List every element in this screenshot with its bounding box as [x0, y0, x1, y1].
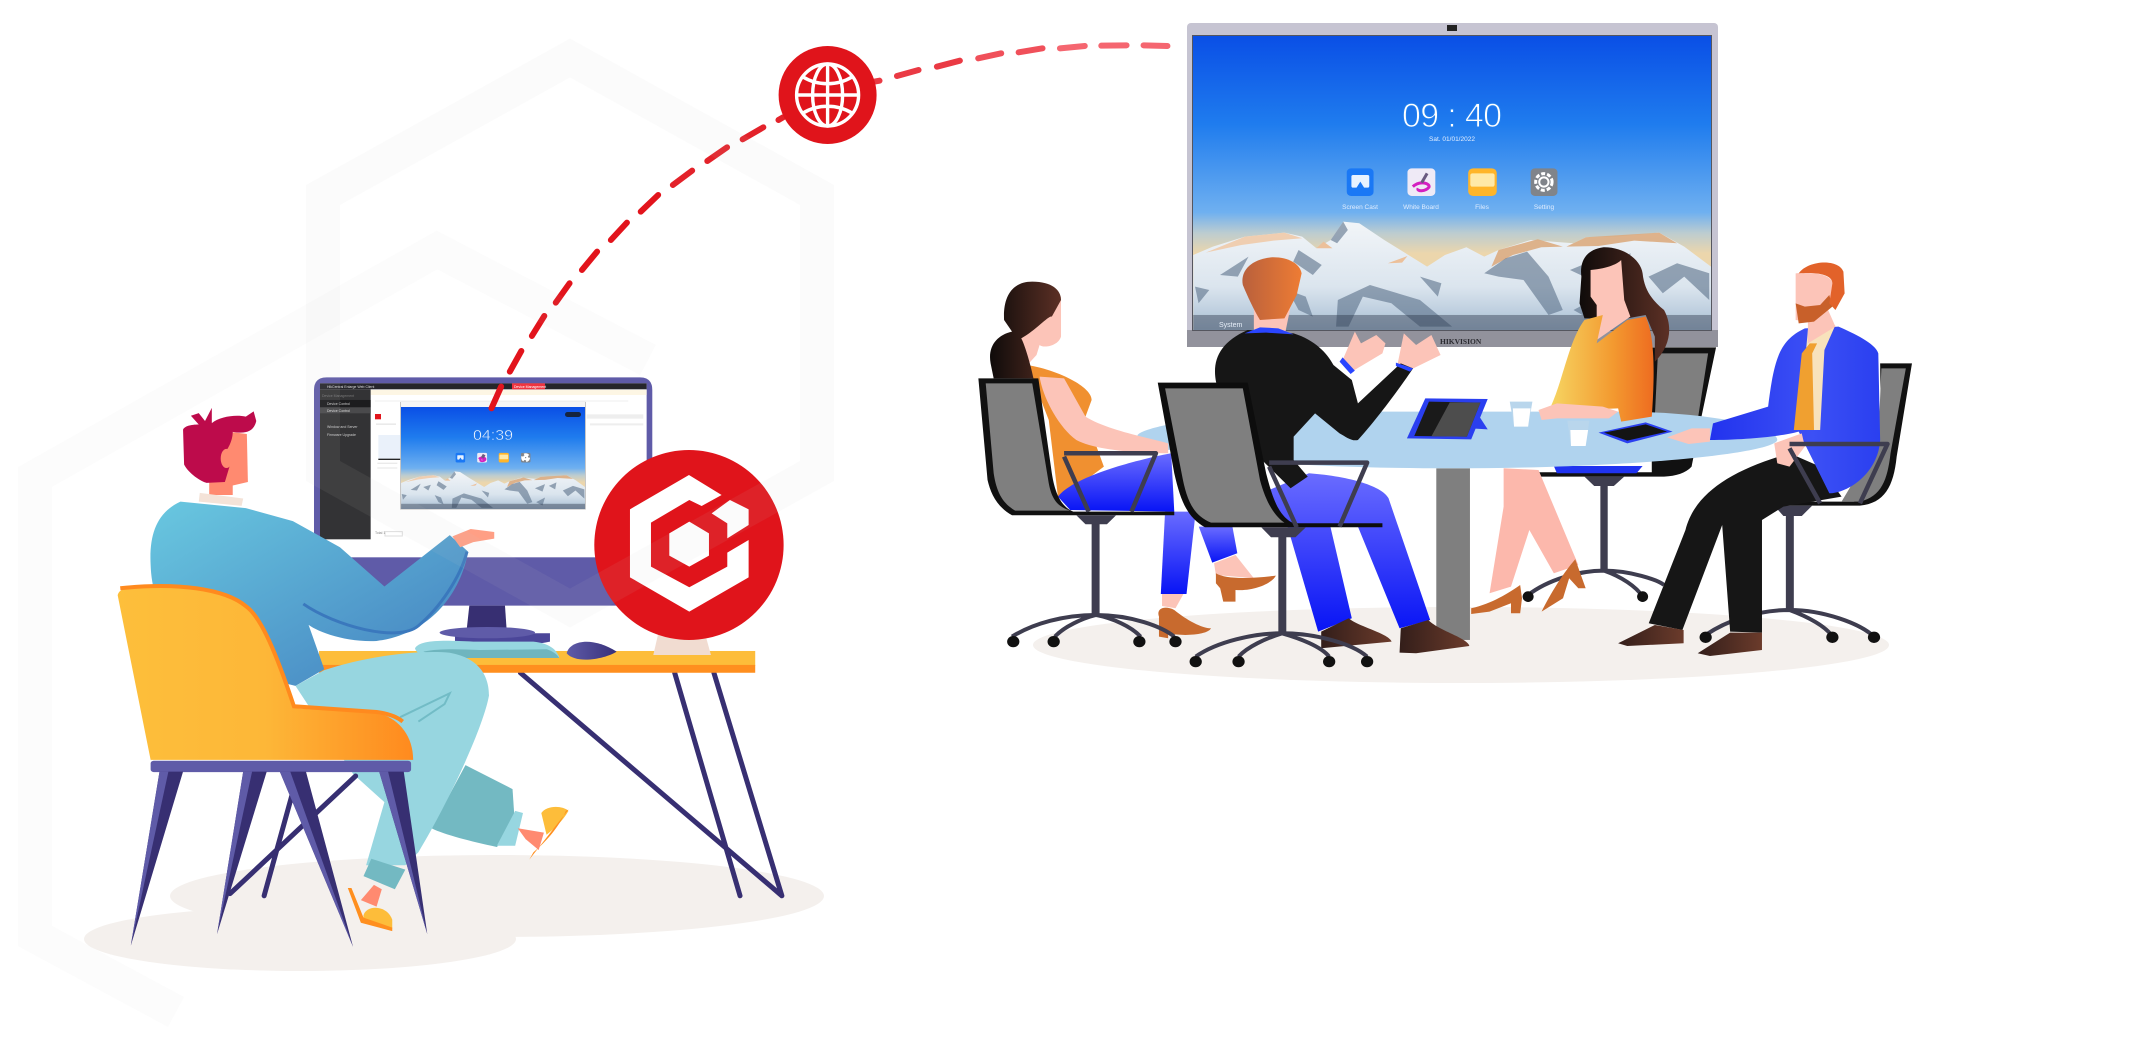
- display app labels: [1342, 204, 1554, 211]
- hand: [452, 529, 494, 547]
- display brand: HIKVISION: [1440, 337, 1482, 346]
- display app labels: Screen Cast: [1342, 204, 1378, 211]
- display app labels: Files: [1475, 204, 1490, 211]
- ground shadow: left: [84, 855, 824, 971]
- monitor UI text: Firmware Upgrade: [327, 433, 356, 437]
- head: [183, 408, 256, 506]
- monitor UI text: HikCentral Enlarge Web Client: [327, 385, 374, 389]
- monitor UI text: Device Control: [327, 402, 350, 406]
- person at desk: [118, 408, 569, 947]
- right man: [1618, 262, 1887, 656]
- monitor UI text: Device Management: [514, 385, 546, 389]
- monitor UI text: Device Management: [322, 394, 354, 398]
- chair back and seat: [118, 585, 413, 772]
- teal sleeve on keyboard: [415, 641, 559, 658]
- display clock: 09 : 40: [1402, 97, 1502, 135]
- glasses: [1510, 402, 1589, 446]
- woman legs: [1471, 466, 1643, 614]
- monitor UI text: [322, 385, 546, 535]
- left woman: [978, 282, 1276, 647]
- sweater: [150, 502, 468, 686]
- display system label: System: [1219, 322, 1243, 329]
- trousers: [295, 652, 489, 931]
- tablet flat: [1599, 422, 1673, 443]
- dashed connection arc: [491, 45, 1167, 408]
- background hexagon watermark: [35, 58, 817, 1012]
- shared clock: 04:39: [473, 427, 513, 444]
- shared window: [401, 402, 585, 509]
- monitor UI text: Window and Server: [327, 425, 358, 429]
- icon: mouse: [567, 642, 617, 660]
- table pedestal: [1436, 468, 1470, 640]
- chair: woman facing viewer: [1523, 347, 1716, 602]
- logo badge stand: [653, 633, 711, 655]
- display app labels: Setting: [1534, 204, 1554, 211]
- tablet on stand: [1407, 398, 1488, 439]
- monitor UI text: Total 1: [375, 531, 385, 535]
- icon: globe: [779, 46, 877, 144]
- interactive display: [1187, 23, 1718, 347]
- monitor UI text: Device Control: [327, 409, 350, 413]
- meeting room scene: [978, 247, 1912, 667]
- desk: [319, 651, 782, 896]
- monitor: [314, 377, 652, 646]
- table top: [1138, 412, 1777, 468]
- display date: Sat. 01/01/2022: [1429, 136, 1475, 143]
- display app labels: White Board: [1403, 204, 1439, 211]
- chair legs: [131, 772, 427, 947]
- centre man: [1158, 257, 1469, 667]
- back leg: [431, 765, 569, 860]
- ground shadow: meeting room: [1033, 607, 1889, 683]
- chair: right man: [1700, 363, 1912, 643]
- icon: red logo badge: [594, 450, 784, 640]
- woman upper body: [1539, 247, 1669, 422]
